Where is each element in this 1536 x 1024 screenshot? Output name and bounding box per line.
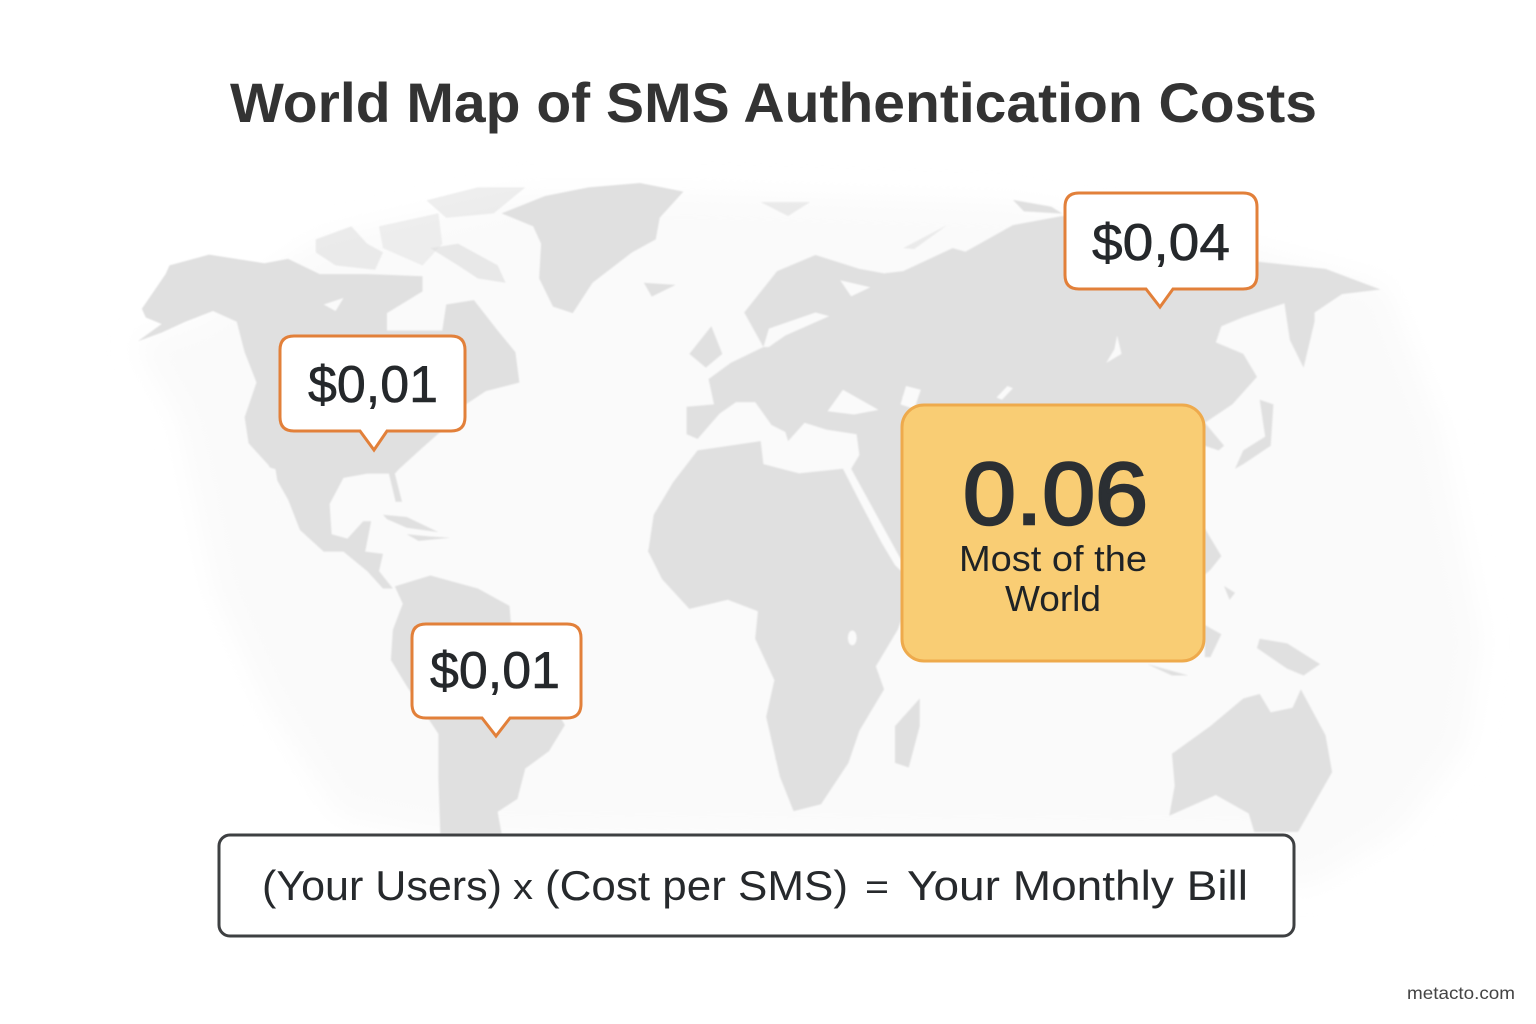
- equals sign: =: [865, 866, 889, 907]
- Madagascar: [895, 699, 920, 767]
- New Guinea: [1257, 639, 1320, 676]
- Gulf of California: [268, 467, 282, 512]
- Black Sea: [828, 390, 879, 415]
- map: Eurasia, Africa, Australia: [648, 200, 1380, 832]
- Sakhalin: [1106, 335, 1121, 363]
- Baltic Sea: [763, 312, 829, 347]
- North America: [138, 255, 519, 589]
- label line 2: World: [1005, 578, 1101, 619]
- brand credit: metacto.com: [1407, 983, 1515, 1003]
- callout: South America price: [412, 624, 581, 736]
- Southeast Asia peninsula: [1205, 528, 1221, 574]
- Great Bear lake: [324, 298, 343, 311]
- formula term: cost: (Cost per SMS): [545, 862, 848, 909]
- price: $0,04: $0,04: [1092, 214, 1230, 272]
- Arctic islands: north: [426, 187, 525, 218]
- Africa: [648, 441, 914, 811]
- formula result: Your Monthly Bill: [907, 862, 1248, 909]
- world map: [138, 183, 1380, 834]
- price: $0,01: $0,01: [308, 356, 438, 414]
- White Sea: [840, 280, 870, 296]
- Novaya Zemlya: [903, 225, 947, 249]
- Japan: [1235, 400, 1273, 469]
- label line 1: Most of the: [959, 538, 1147, 579]
- Hispaniola: [407, 534, 450, 541]
- Arctic islands: Baffin: [430, 244, 506, 283]
- Caspian Sea: [900, 386, 921, 409]
- title: World Map of SMS Authentication Costs: [230, 71, 1317, 134]
- Persian Gulf: [996, 386, 1013, 400]
- panel: most of the world: [902, 405, 1204, 661]
- big number: 0.06: [963, 444, 1148, 543]
- Greenland: [502, 183, 683, 313]
- South America: [391, 576, 565, 834]
- Novosibirsk islands: [1013, 200, 1062, 214]
- Australia: [1169, 689, 1332, 832]
- price: $0,01: $0,01: [430, 642, 560, 700]
- Svalbard: [761, 202, 810, 216]
- Iceland: [644, 283, 676, 297]
- map: Americas and Greenland: [138, 183, 683, 834]
- Cuba: [383, 515, 438, 532]
- Great Britain and Ireland: [689, 326, 722, 368]
- Philippines: [1224, 586, 1235, 600]
- multiply sign: x: [513, 866, 533, 907]
- Borneo: [1205, 625, 1221, 657]
- Sumatra and Java: [1147, 664, 1188, 676]
- callout: Russia price: [1065, 193, 1257, 307]
- Eurasia: [687, 216, 1380, 561]
- map ocean glow: [135, 195, 1480, 885]
- Arctic islands: west: [316, 226, 383, 270]
- formula box: [219, 835, 1294, 936]
- Arctic islands: centre: [379, 213, 442, 265]
- formula term: users: (Your Users): [262, 862, 502, 909]
- callout: North America price: [280, 336, 465, 450]
- Lake Victoria: [848, 631, 857, 645]
